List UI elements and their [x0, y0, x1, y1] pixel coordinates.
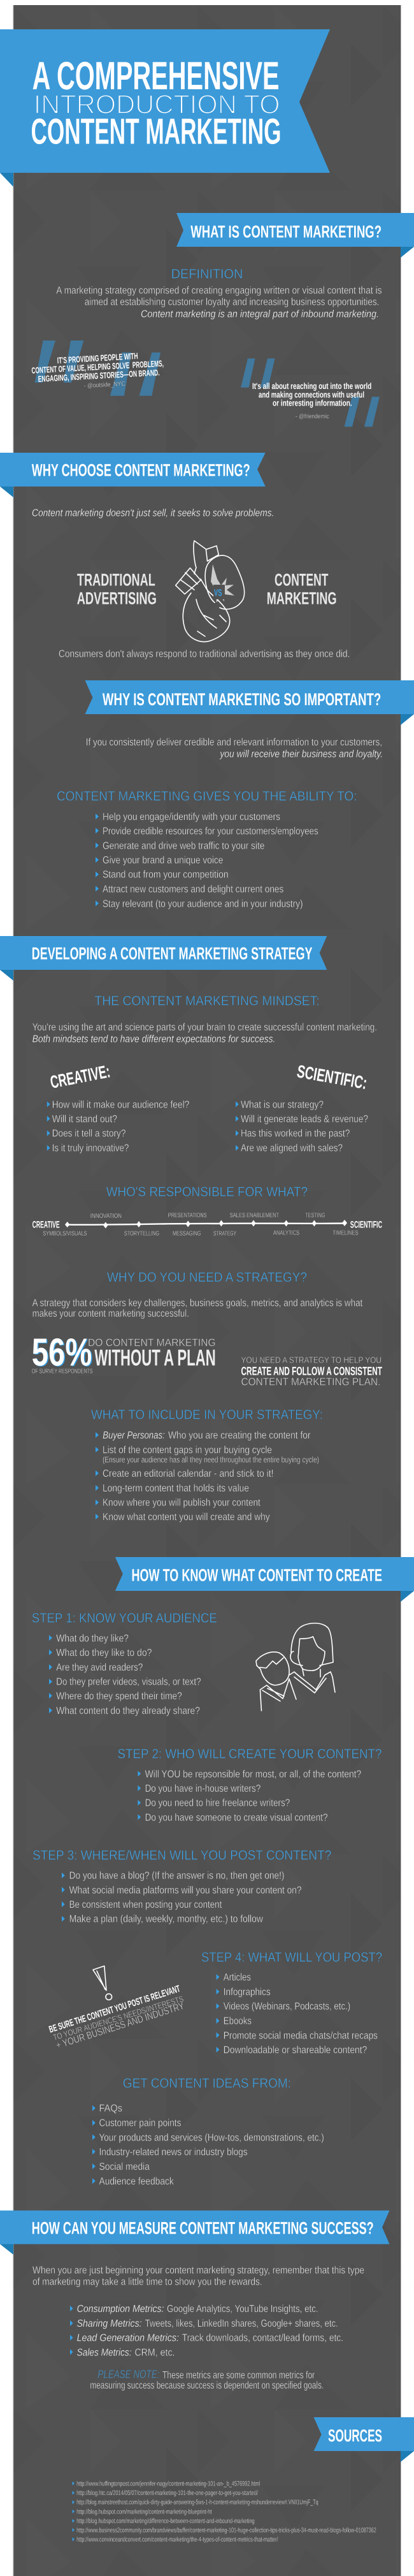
list: scientific questions: Has this worked in the past? [241, 1129, 350, 1139]
heading: step 3: STEP 3: WHERE/WHEN WILL YOU POST CONTENT? [32, 1848, 331, 1863]
chart: creative to scientific spectrum: SYMBOLS/VISUALS [43, 1230, 87, 1237]
callout: please note: measuring success because success is dependent on specified goals. [90, 2380, 324, 2391]
callout: 56 percent statistic [32, 1331, 216, 1375]
list: abilities: Give your brand a unique voice [103, 855, 223, 866]
callout: 56 percent statistic: OF SURVEY RESPONDENTS [32, 1368, 93, 1375]
list: audience questions: What do they like? [56, 1633, 129, 1644]
section banner: why choose content marketing [0, 453, 266, 497]
callout: relevant content [48, 1984, 186, 2051]
heading: definition: DEFINITION [171, 267, 243, 282]
callout: consistent plan: CONTENT MARKETING PLAN. [241, 1377, 380, 1388]
list: strategy contents: Know what content you will create and why [103, 1512, 270, 1523]
list: source links [73, 2480, 376, 2543]
list: content ideas: Customer pain points [99, 2118, 181, 2129]
callout: quote from friendemic: or interesting information. [273, 399, 352, 408]
list: strategy contents: List of the content gaps in your buying cycle [103, 1445, 272, 1456]
list: audience questions: What content do they already share? [56, 1706, 200, 1716]
callout: quote from outside_NYC: IT'S PROVIDING PEOPLE WITH [57, 351, 138, 365]
title banner [0, 29, 330, 187]
list: creative questions [47, 1099, 189, 1154]
list: scientific questions: Will it generate leads & revenue? [241, 1114, 368, 1125]
text block: strategy: makes your content marketing successful. [32, 1308, 189, 1319]
callout: relevant content: BE SURE THE CONTENT YOU POST IS RELEVANT [48, 1984, 182, 2035]
text block: solve problems: Content marketing doesn't just sell, it seeks to solve problems. [32, 508, 274, 518]
list: audience questions: Where do they spend their time? [56, 1691, 182, 1702]
icon: audience people [256, 1623, 335, 1711]
list: abilities: Generate and drive web traffic to your site [103, 840, 264, 851]
text block: mindset [32, 1022, 377, 1044]
callout: quote from friendemic: It's all about reaching out into the world [252, 381, 371, 391]
icon: boxing gloves vs [176, 541, 245, 641]
list: abilities: Stand out from your competition [103, 870, 229, 881]
list: source links: http://www.huffingtonpost.com/jennifer-nagy/content-marketing-101-an-_b_4576992.html [76, 2480, 260, 2487]
list: who creates content: Do you have in-house writers? [145, 1783, 261, 1794]
list: abilities: Attract new customers and delight current ones [103, 884, 283, 895]
label: traditional advertising: ADVERTISING [77, 589, 157, 608]
heading: step 4: STEP 4: WHAT WILL YOU POST? [201, 1950, 382, 1965]
list: metrics: Lead Generation Metrics: [77, 2333, 179, 2344]
callout: quote from outside_NYC: CONTENT OF VALUE, HELPING SOLVE PROBLEMS, [31, 358, 164, 376]
heading: content ideas: GET CONTENT IDEAS FROM: [123, 2076, 291, 2091]
list: metrics: Consumption Metrics: [77, 2304, 164, 2315]
section banner: how can you measure success [0, 2211, 390, 2255]
text block: rewards take time [32, 2265, 364, 2287]
chart: creative to scientific spectrum [32, 1212, 382, 1237]
list: metrics: Google Analytics, YouTube Insights, etc. [167, 2304, 318, 2315]
section banner: why is content marketing so important [85, 680, 414, 725]
callout: quote from outside_NYC [31, 340, 164, 396]
list: where and when to post: Do you have a blog? (If the answer is no, then get one!) [69, 1871, 284, 1882]
list: abilities: Stay relevant (to your audience and in your industry) [103, 898, 303, 909]
list: strategy contents: (Ensure your audience has all they need throughout the entire buying cycle) [103, 1454, 319, 1464]
list: audience questions: Do they prefer videos, visuals, or text? [56, 1677, 201, 1688]
callout: relevant content: TO YOUR AUDIENCE'S NEEDS/INTERESTS [52, 1994, 185, 2042]
list: who creates content: Will YOU be repsonsible for most, or all, of the content? [145, 1769, 361, 1780]
callout: please note: PLEASE NOTE: [97, 2367, 159, 2380]
list: audience questions: What do they like to do? [56, 1648, 152, 1658]
list: abilities: Help you engage/identify with your customers [103, 812, 280, 823]
text block: mindset: Both mindsets tend to have different expectations for success. [32, 1034, 275, 1044]
text block: rewards take time: of marketing may take a little time to show you the rewards. [32, 2276, 262, 2287]
list: where and when to post [62, 1871, 302, 1925]
chart: creative to scientific spectrum: TIMELINES [332, 1230, 359, 1237]
section banner: why choose content marketing: WHY CHOOSE CONTENT MARKETING? [32, 461, 250, 480]
heading: responsibility: WHO'S RESPONSIBLE FOR WHAT? [106, 1185, 308, 1199]
text block: strategy: A strategy that considers key challenges, business goals, metrics, and analytics is what [32, 1298, 363, 1308]
text block: definition [56, 286, 382, 320]
list: what to post: Videos (Webinars, Podcasts, etc.) [224, 2002, 350, 2012]
text block: deliver credible information [86, 737, 383, 760]
list: creative questions: Will it stand out? [52, 1114, 117, 1125]
list: source links: http://blog.hubspot.com/marketing/difference-between-content-and-inbound-marketing [76, 2517, 255, 2525]
list: content ideas: Social media [99, 2162, 150, 2172]
chart: creative to scientific spectrum: INNOVATION [90, 1213, 122, 1220]
list: where and when to post: Make a plan (daily, weekly, monthy, etc.) to follow [69, 1914, 263, 1925]
list: content ideas: Industry-related news or industry blogs [99, 2147, 247, 2158]
callout: relevant content: + YOUR BUSINESS AND INDUSTRY [55, 2001, 186, 2051]
icon: exclamation mark [93, 1966, 112, 2000]
callout: please note: These metrics are some common metrics for [162, 2370, 315, 2381]
list: scientific questions: Are we aligned with sales? [241, 1143, 343, 1154]
heading: mindset: THE CONTENT MARKETING MINDSET: [94, 994, 320, 1009]
chart: creative to scientific spectrum: SCIENTIFIC [350, 1220, 382, 1231]
list: scientific questions: What is our strategy? [241, 1099, 324, 1110]
list: what to post: Infographics [224, 1987, 271, 1998]
heading: step 1: STEP 1: KNOW YOUR AUDIENCE [32, 1611, 217, 1626]
text block: definition: Content marketing is an integral part of inbound marketing. [141, 309, 379, 320]
chart: creative to scientific spectrum: PRESENTATIONS [168, 1212, 207, 1219]
label: traditional advertising: TRADITIONAL [77, 570, 155, 589]
list: strategy contents: Long-term content that holds its value [103, 1483, 249, 1494]
list: content ideas: FAQs [99, 2104, 122, 2114]
list: creative questions: Does it tell a story? [52, 1129, 125, 1139]
label: content marketing: CONTENT [275, 570, 329, 589]
list: what to post: Ebooks [224, 2016, 252, 2027]
list: content ideas [92, 2104, 324, 2187]
list: what to post: Articles [224, 1972, 251, 1983]
label: traditional advertising [77, 570, 157, 608]
icon: boxing gloves vs: VS [214, 588, 222, 598]
list: scientific questions [236, 1099, 368, 1154]
list: what to post: Downloadable or shareable content? [224, 2045, 367, 2056]
list: strategy contents: Create an editorial calendar - and stick to it! [103, 1468, 274, 1479]
text block: rewards take time: When you are just beginning your content marketing strategy, remember that this type [32, 2265, 364, 2276]
callout: consistent plan: YOU NEED A STRATEGY TO HELP YOU [241, 1355, 382, 1365]
list: strategy contents: Buyer Personas: [103, 1430, 165, 1441]
list: what to post [217, 1972, 378, 2056]
callout: quote from friendemic [241, 358, 380, 427]
list: metrics: CRM, etc. [134, 2347, 175, 2358]
callout: 56 percent statistic: WITHOUT A PLAN [94, 1345, 216, 1371]
label: content marketing: MARKETING [267, 589, 337, 608]
callout: quote from friendemic: - @friendemic [296, 413, 329, 420]
list: who creates content: Do you need to hire freelance writers? [145, 1798, 290, 1809]
list: where and when to post: Be consistent when posting your content [69, 1899, 222, 1910]
list: who creates content [138, 1769, 361, 1823]
callout: quote from friendemic: and making connections with useful [259, 390, 364, 399]
heading: what to include: WHAT TO INCLUDE IN YOUR STRATEGY: [91, 1407, 323, 1422]
list: strategy contents: Who you are creating the content for [168, 1430, 311, 1441]
list: metrics: Track downloads, contact/lead forms, etc. [182, 2333, 343, 2344]
list: strategy contents [96, 1430, 319, 1523]
chart: creative to scientific spectrum: MESSAGING [173, 1230, 201, 1237]
list: where and when to post: What social media platforms will you share your content on? [69, 1885, 302, 1896]
text block: consumers: Consumers don't always respond to traditional advertising as they once did. [59, 649, 350, 660]
callout: 56 percent statistic: DO CONTENT MARKETING [88, 1337, 216, 1349]
list: audience questions: Are they avid readers? [56, 1662, 143, 1673]
section banner: sources: SOURCES [328, 2426, 382, 2445]
list: source links: http://blog.htc.ca/2014/05/07/content-marketing-101-the-one-pager-to-get-you-started/ [76, 2489, 258, 2497]
list: metrics: Tweets, likes, LinkedIn shares, Google+ shares, etc. [145, 2318, 338, 2329]
callout: 56 percent statistic: 56% [32, 1331, 93, 1375]
chart: creative to scientific spectrum: ANALYTICS [273, 1230, 299, 1237]
list: strategy contents: Know where you will publish your content [103, 1498, 261, 1509]
list: audience questions [49, 1633, 201, 1716]
list: creative questions: Is it truly innovative? [52, 1143, 129, 1154]
callout: please note [90, 2367, 324, 2391]
section banner: what is content marketing [176, 213, 414, 258]
callout: quote from outside_NYC: - @outside_NYC [83, 381, 125, 390]
list: metrics: Sharing Metrics: [77, 2318, 142, 2329]
list: metrics: Sales Metrics: [77, 2347, 131, 2358]
list: metrics [70, 2304, 343, 2358]
section banner: how to know what content to create [115, 1557, 414, 1602]
callout: quote from outside_NYC: ENGAGING, INSPIRING STORIES—ON BRAND. [38, 368, 160, 384]
heading: ability to: CONTENT MARKETING GIVES YOU THE ABILITY TO: [57, 789, 357, 804]
list: who creates content: Do you have someone to create visual content? [145, 1812, 328, 1823]
callout: consistent plan [241, 1355, 382, 1388]
chart: creative to scientific spectrum: TESTING [305, 1212, 325, 1219]
chart: creative to scientific spectrum: STRATEGY [213, 1230, 236, 1237]
list: content ideas: Your products and services (How-tos, demonstrations, etc.) [99, 2132, 324, 2143]
callout: 56 percent statistic: 56% [32, 1331, 92, 1374]
list: content ideas: Audience feedback [99, 2176, 175, 2187]
list: abilities: Provide credible resources for your customers/employees [103, 826, 318, 837]
section banner: developing a content marketing strategy [0, 936, 327, 981]
text block: deliver credible information: you will receive their business and loyalty. [220, 749, 383, 760]
list: what to post: Promote social media chats/chat recaps [224, 2030, 378, 2041]
heading: step 2: STEP 2: WHO WILL CREATE YOUR CONTENT? [117, 1747, 382, 1762]
chart: creative to scientific spectrum: SALES ENABLEMENT [230, 1212, 279, 1219]
label: content marketing [267, 570, 337, 608]
title banner: INTRODUCTION TO [34, 89, 280, 119]
chart: creative to scientific spectrum: STORYTELLING [124, 1230, 159, 1237]
list: source links: http://www.convinceandconvert.com/content-marketing/the-4-types-of-content-metrics-that-matter/ [76, 2536, 278, 2543]
title banner: A COMPREHENSIVE [32, 54, 280, 98]
section banner: sources [314, 2417, 414, 2462]
list: creative questions: How will it make our audience feel? [52, 1099, 189, 1110]
list: source links: http://blog.hubspot.com/marketing/content-marketing-blueprint-ht [76, 2508, 212, 2515]
heading: scientific: SCIENTIFIC: [296, 1061, 369, 1093]
chart: creative to scientific spectrum: CREATIVE [32, 1220, 60, 1231]
heading: creative: CREATIVE: [48, 1061, 111, 1092]
heading: why a strategy: WHY DO YOU NEED A STRATEGY? [107, 1270, 307, 1285]
text block: strategy [32, 1298, 363, 1319]
list: abilities [96, 812, 318, 909]
